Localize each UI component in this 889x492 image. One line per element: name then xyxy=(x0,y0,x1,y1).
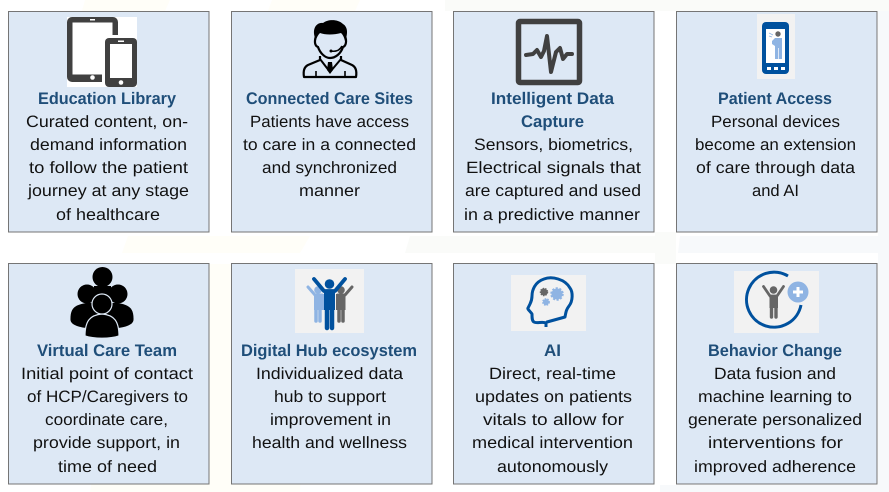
text block: become an extension xyxy=(695,136,856,154)
panel: Digital Hub ecosystem xyxy=(232,264,432,484)
heading: Intelligent Data xyxy=(491,89,615,108)
panel: Behavior Change xyxy=(676,264,877,484)
text block: to follow the patient xyxy=(29,159,189,177)
icon: three people with raised arms xyxy=(295,269,364,333)
icon: person in circle with plus xyxy=(734,271,819,333)
text block: of HCP/Caregivers to xyxy=(27,388,188,406)
text block: autonomously xyxy=(497,458,609,476)
text block: and synchronized xyxy=(262,159,397,177)
text block: demand information xyxy=(30,136,187,154)
panel: Patient Access xyxy=(676,12,877,232)
text block: improvement in xyxy=(270,411,391,429)
text block: Curated content, on- xyxy=(26,113,188,131)
text block: Initial point of contact xyxy=(21,365,193,383)
heading: Capture xyxy=(521,112,584,131)
text block: Patients have access xyxy=(250,113,409,131)
heading: Virtual Care Team xyxy=(37,341,177,360)
icon: phone with person xyxy=(757,14,795,79)
panel: Connected Care Sites xyxy=(232,12,432,232)
text block: Personal devices xyxy=(711,113,840,131)
text block: interventions for xyxy=(708,434,844,452)
text block: journey at any stage xyxy=(27,182,189,200)
text block: improved adherence xyxy=(694,458,856,476)
heading: AI xyxy=(544,341,561,360)
text block xyxy=(472,365,633,476)
text block: manner xyxy=(299,182,361,200)
text block: of care through data xyxy=(696,159,856,177)
text block: Electrical signals that xyxy=(466,159,641,177)
text block xyxy=(243,113,416,200)
text block: hub to support xyxy=(274,388,386,406)
panel: Virtual Care Team xyxy=(8,264,209,484)
panel: Education Library xyxy=(8,12,209,232)
heading: Digital Hub ecosystem xyxy=(241,341,417,360)
text block: machine learning to xyxy=(698,388,852,406)
panel: Intelligent Data Capture xyxy=(454,12,654,232)
text block: updates on patients xyxy=(475,388,632,406)
heading: Patient Access xyxy=(718,89,832,108)
text block: and AI xyxy=(752,182,799,200)
icon: head with gears xyxy=(511,275,586,331)
icon: group of people xyxy=(70,267,134,338)
text block xyxy=(695,113,856,200)
text block: Individualized data xyxy=(256,365,404,383)
text block: Data fusion and xyxy=(714,365,836,383)
heading: Connected Care Sites xyxy=(246,89,413,108)
text block: to care in a connected xyxy=(243,136,416,154)
text block: Sensors, biometrics, xyxy=(474,136,633,154)
text block: vitals to allow for xyxy=(483,411,625,429)
text block: health and wellness xyxy=(252,434,407,452)
heading: Education Library xyxy=(38,89,177,108)
heading xyxy=(491,89,615,131)
heading: Behavior Change xyxy=(708,341,842,360)
text block: provide support, in xyxy=(33,434,180,452)
text block: Direct, real-time xyxy=(489,365,616,383)
panel: AI xyxy=(454,264,654,484)
text block xyxy=(252,365,407,452)
text block: time of need xyxy=(58,458,157,476)
text block: of healthcare xyxy=(56,206,160,224)
icon: tablet and phone xyxy=(67,17,137,87)
text block xyxy=(464,136,641,224)
text block: in a predictive manner xyxy=(464,206,641,224)
text block: medical intervention xyxy=(472,434,633,452)
icon: signal monitor xyxy=(518,22,580,82)
text block: generate personalized xyxy=(688,411,862,429)
text block xyxy=(21,365,193,476)
icon: person with headset xyxy=(304,20,356,77)
text block xyxy=(26,113,189,224)
text block: coordinate care, xyxy=(45,411,168,429)
text block: are captured and used xyxy=(465,182,641,200)
text block xyxy=(688,365,862,476)
